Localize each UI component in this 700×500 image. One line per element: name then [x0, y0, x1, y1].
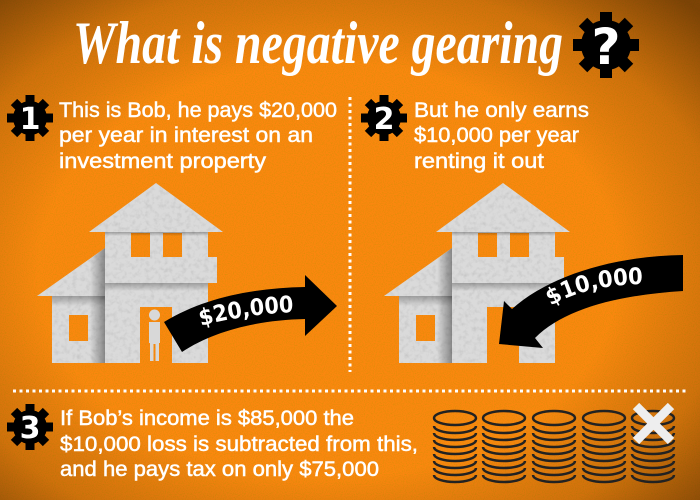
- icon: gear number 2: [361, 95, 407, 141]
- icon: white cross: [636, 406, 671, 441]
- coin stack 5: [632, 411, 674, 482]
- icon: question gear: [573, 12, 639, 78]
- text: step 2 description: renting it out: [414, 150, 544, 173]
- text: step 3 description: and he pays tax on only $75,000: [60, 458, 379, 481]
- text: step 2 description: $10,000 per year: [414, 124, 579, 147]
- text: step 2 description: [414, 99, 589, 173]
- text: step 3 description: $10,000 loss is subtracted from this,: [60, 433, 418, 456]
- icon: gear number 1: [7, 95, 53, 141]
- icon: gear number 1: 1: [20, 102, 40, 137]
- icon: house: [384, 183, 570, 363]
- text: step 1 description: per year in interest on an: [59, 124, 313, 147]
- text: step 1 description: investment property: [59, 150, 267, 173]
- divider: vertical dotted: [348, 97, 352, 372]
- icon: Bob: [149, 310, 160, 361]
- icon: gear number 3: 3: [20, 411, 40, 446]
- coin stack 3: [533, 411, 575, 482]
- icon: house with Bob: [37, 183, 223, 363]
- coin stack 4: [583, 411, 625, 482]
- arrow: $20,000 outgoing: $20,000: [200, 295, 292, 328]
- arrow: $20,000 outgoing: [164, 275, 337, 352]
- arrow: $10,000 incoming: [499, 255, 683, 348]
- panel: step 1: [7, 95, 337, 363]
- panel: step 3: [7, 404, 674, 482]
- arrow: $10,000 incoming: $10,000: [546, 267, 642, 306]
- text: step 1 description: This is Bob, he pays $20,000: [59, 99, 337, 122]
- divider: horizontal dotted: [13, 390, 686, 392]
- text: step 3 description: [60, 407, 418, 481]
- title: What is negative gearing: [73, 10, 563, 76]
- icon: gear number 2: 2: [374, 102, 394, 137]
- text: step 3 description: If Bob’s income is $85,000 the: [60, 407, 354, 430]
- icon: gear number 3: [7, 404, 53, 450]
- text: step 2 description: But he only earns: [414, 99, 589, 122]
- text: step 1 description: [59, 99, 337, 173]
- coin stack 2: [483, 411, 525, 482]
- icon: question gear: ?: [591, 18, 621, 76]
- icon: coin stacks: [434, 411, 674, 482]
- panel: step 2: [361, 95, 683, 363]
- coin stack 1: [434, 411, 476, 482]
